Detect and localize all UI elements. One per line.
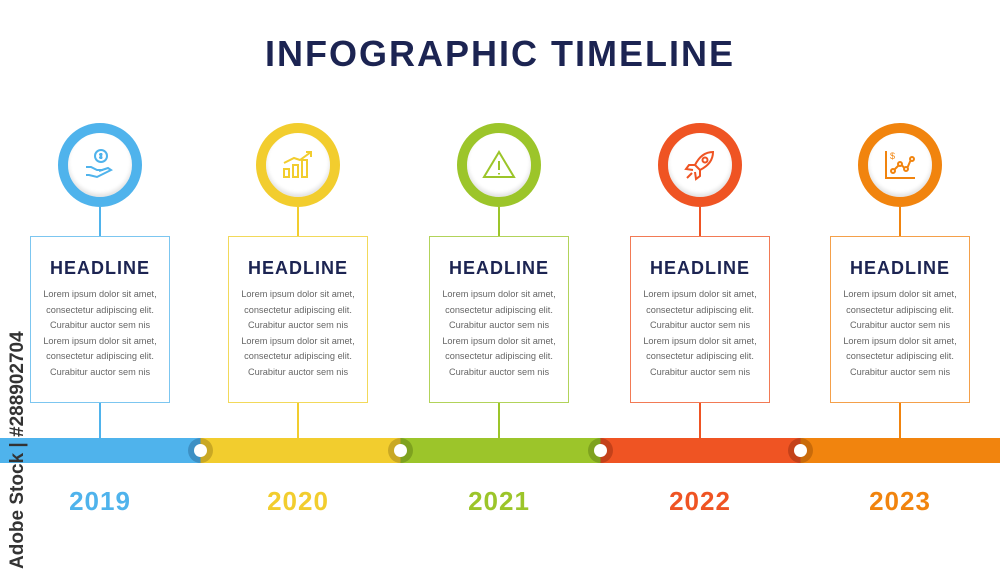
panel 2023 (830, 236, 970, 403)
panel 2022: Lorem ipsum dolor sit amet, (643, 289, 757, 299)
year 2021: 2021 (468, 486, 530, 516)
panel 2020: HEADLINE (248, 258, 348, 278)
panel 2023: consectetur adipiscing elit. (846, 305, 954, 315)
panel 2023: HEADLINE (850, 258, 950, 278)
junction dots (188, 438, 813, 463)
panel 2019: Lorem ipsum dolor sit amet, (43, 289, 157, 299)
title: INFOGRAPHIC TIMELINE (265, 33, 735, 74)
panel 2020: Curabitur auctor sem nis (248, 367, 348, 377)
panel 2022: Lorem ipsum dolor sit amet, (643, 336, 757, 346)
panel 2021: Curabitur auctor sem nis (449, 320, 549, 330)
panel 2020: Lorem ipsum dolor sit amet, (241, 289, 355, 299)
step 2022 (630, 123, 770, 438)
icon: growth chart (256, 123, 340, 207)
icon: rocket (658, 123, 742, 207)
panel 2023: consectetur adipiscing elit. (846, 351, 954, 361)
year 2022: 2022 (669, 486, 731, 516)
panel 2019: Lorem ipsum dolor sit amet, (43, 336, 157, 346)
panel 2022: consectetur adipiscing elit. (646, 305, 754, 315)
panel 2019 (30, 236, 170, 403)
year 2023: 2023 (869, 486, 931, 516)
icon: warning (457, 123, 541, 207)
panel 2022: Curabitur auctor sem nis (650, 320, 750, 330)
step 2019 (30, 123, 170, 438)
panel 2020 (228, 236, 368, 403)
panel 2020: consectetur adipiscing elit. (244, 305, 352, 315)
icon: money hand (58, 123, 142, 207)
step 2023 (830, 123, 970, 438)
panel 2021: Lorem ipsum dolor sit amet, (442, 289, 556, 299)
panel 2020: Lorem ipsum dolor sit amet, (241, 336, 355, 346)
panel 2023: Lorem ipsum dolor sit amet, (843, 289, 957, 299)
panel 2022: Curabitur auctor sem nis (650, 367, 750, 377)
panel 2022 (630, 236, 770, 403)
icon: analytics (858, 123, 942, 207)
panel 2021: Curabitur auctor sem nis (449, 367, 549, 377)
timeline bar (0, 438, 1000, 463)
panel 2023: Lorem ipsum dolor sit amet, (843, 336, 957, 346)
panel 2019: Curabitur auctor sem nis (50, 320, 150, 330)
panel 2020: consectetur adipiscing elit. (244, 351, 352, 361)
panel 2023: Curabitur auctor sem nis (850, 320, 950, 330)
panel 2021: consectetur adipiscing elit. (445, 351, 553, 361)
panel 2019: consectetur adipiscing elit. (46, 351, 154, 361)
panel 2019: Curabitur auctor sem nis (50, 367, 150, 377)
year 2019: 2019 (69, 486, 131, 516)
panel 2023: Curabitur auctor sem nis (850, 367, 950, 377)
panel 2021: consectetur adipiscing elit. (445, 305, 553, 315)
icon: analytics: $ (890, 151, 895, 161)
step 2020 (228, 123, 368, 438)
panel 2020: Curabitur auctor sem nis (248, 320, 348, 330)
panel 2021 (429, 236, 569, 403)
panel 2019: HEADLINE (50, 258, 150, 278)
panel 2022: HEADLINE (650, 258, 750, 278)
panel 2021: Lorem ipsum dolor sit amet, (442, 336, 556, 346)
panel 2021: HEADLINE (449, 258, 549, 278)
panel 2019: consectetur adipiscing elit. (46, 305, 154, 315)
year 2020: 2020 (267, 486, 329, 516)
watermark id: Adobe Stock | #288902704 (7, 331, 28, 569)
step 2021 (429, 123, 569, 438)
panel 2022: consectetur adipiscing elit. (646, 351, 754, 361)
